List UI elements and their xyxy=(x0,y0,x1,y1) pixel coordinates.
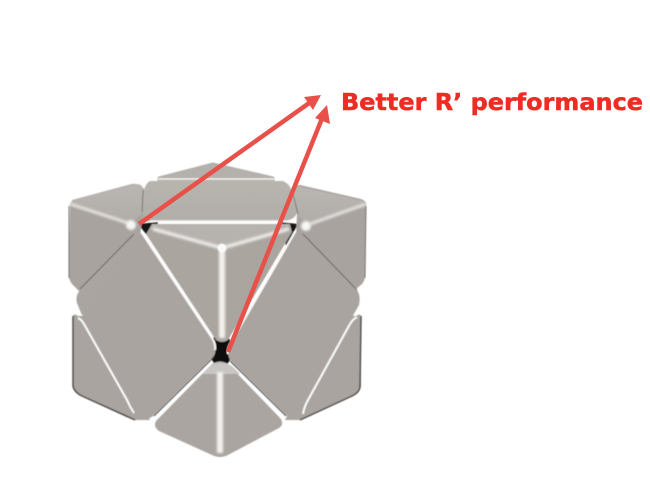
top back triangle xyxy=(158,164,274,184)
top left corner piece xyxy=(69,184,144,294)
front upper triangle xyxy=(146,224,292,342)
label: Better R' performance: Better R’ performance xyxy=(341,88,643,116)
bottom corner white edge highlights xyxy=(78,317,357,414)
bottom right corner piece xyxy=(285,314,361,420)
arrow: upper left edge to label xyxy=(139,95,321,224)
bottom front triangle xyxy=(155,362,282,457)
bottom left corner piece xyxy=(73,314,150,420)
top right corner piece xyxy=(292,185,366,294)
cube illustration xyxy=(69,164,366,457)
left diamond face xyxy=(76,232,216,419)
top center band xyxy=(141,181,297,221)
right diamond face xyxy=(228,232,360,418)
cube dark gaps xyxy=(138,222,298,367)
arrow: center hole to label xyxy=(228,105,330,352)
